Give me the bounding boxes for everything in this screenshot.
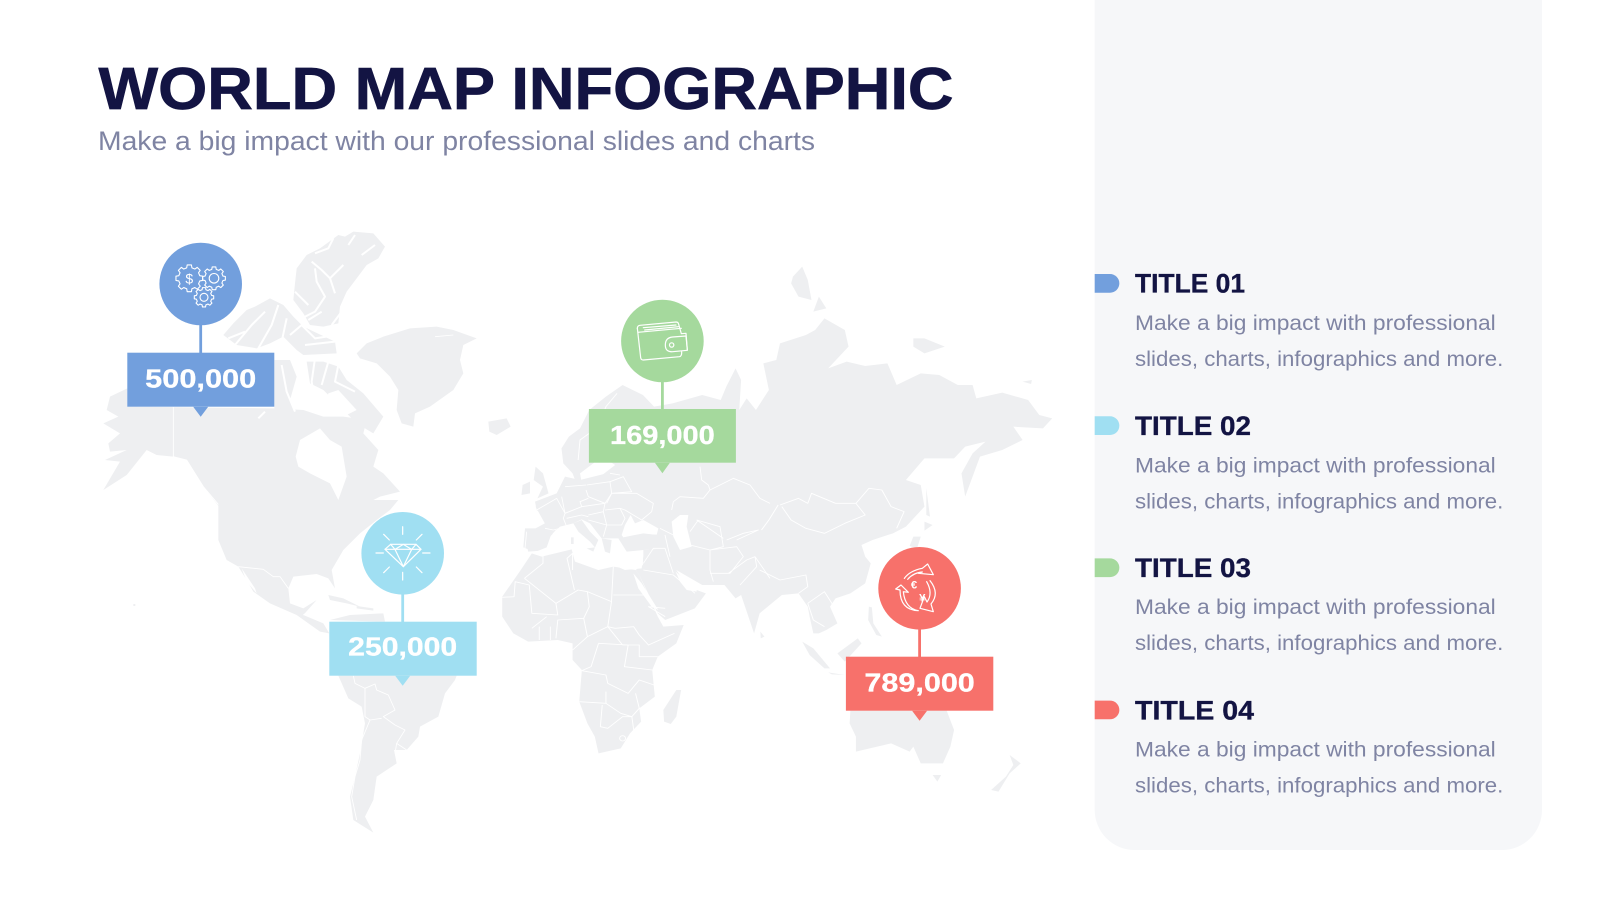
legend item 02: slides, charts, infographics and more.	[1135, 489, 1503, 513]
legend item 03	[1095, 553, 1503, 655]
marker 01: blue 500,000	[127, 243, 274, 417]
icon: currency exchange: ¥	[919, 592, 926, 604]
value box	[127, 353, 274, 407]
icon: currency exchange	[896, 564, 935, 612]
connector line	[661, 378, 664, 411]
legend title: TITLE 04	[1135, 695, 1254, 725]
legend marker	[1095, 416, 1119, 435]
icon: money gears	[176, 265, 225, 307]
panel: legend background	[1095, 0, 1542, 850]
legend text: Make a big impact with professional	[1135, 311, 1496, 335]
title: WORLD MAP INFOGRAPHIC	[98, 55, 953, 122]
circle badge	[361, 512, 444, 595]
circle badge	[621, 300, 704, 382]
marker 03: green 169,000	[589, 300, 736, 473]
legend item 04: slides, charts, infographics and more.	[1135, 774, 1503, 798]
legend item 02	[1095, 411, 1503, 513]
icon: money gears: $	[185, 270, 193, 286]
legend item 01: slides, charts, infographics and more.	[1135, 347, 1503, 371]
connector line	[401, 590, 404, 623]
value: 250,000	[348, 632, 457, 662]
world map	[103, 232, 1052, 833]
value: 500,000	[145, 364, 256, 394]
legend title: TITLE 01	[1135, 269, 1245, 299]
legend marker	[1095, 558, 1119, 577]
legend item 04	[1095, 695, 1503, 798]
pointer	[395, 676, 410, 686]
value box	[846, 657, 993, 711]
legend title: TITLE 02	[1135, 411, 1251, 441]
pointer	[193, 407, 208, 417]
icon: diamond	[376, 527, 430, 580]
legend text: Make a big impact with professional	[1135, 738, 1496, 762]
marker 02: light blue 250,000	[329, 512, 477, 686]
legend title: TITLE 03	[1135, 553, 1251, 583]
legend marker	[1095, 274, 1119, 293]
legend text: Make a big impact with professional	[1135, 453, 1496, 477]
pointer	[912, 711, 927, 721]
value: 169,000	[610, 420, 715, 450]
legend marker	[1095, 701, 1119, 719]
legend item 01	[1095, 269, 1503, 371]
marker 04: red 789,000	[846, 547, 993, 721]
legend item 03: slides, charts, infographics and more.	[1135, 631, 1503, 655]
value box	[589, 409, 736, 463]
value: 789,000	[864, 668, 975, 698]
icon: wallet	[637, 322, 687, 360]
connector line	[199, 320, 202, 354]
subtitle: Make a big impact with our professional slides and charts	[98, 126, 815, 156]
pointer	[655, 463, 670, 473]
circle badge	[878, 547, 961, 630]
icon: currency exchange: €	[911, 580, 918, 592]
connector line	[918, 625, 921, 658]
legend text: Make a big impact with professional	[1135, 595, 1496, 619]
value box	[329, 622, 477, 676]
circle badge	[159, 243, 242, 325]
